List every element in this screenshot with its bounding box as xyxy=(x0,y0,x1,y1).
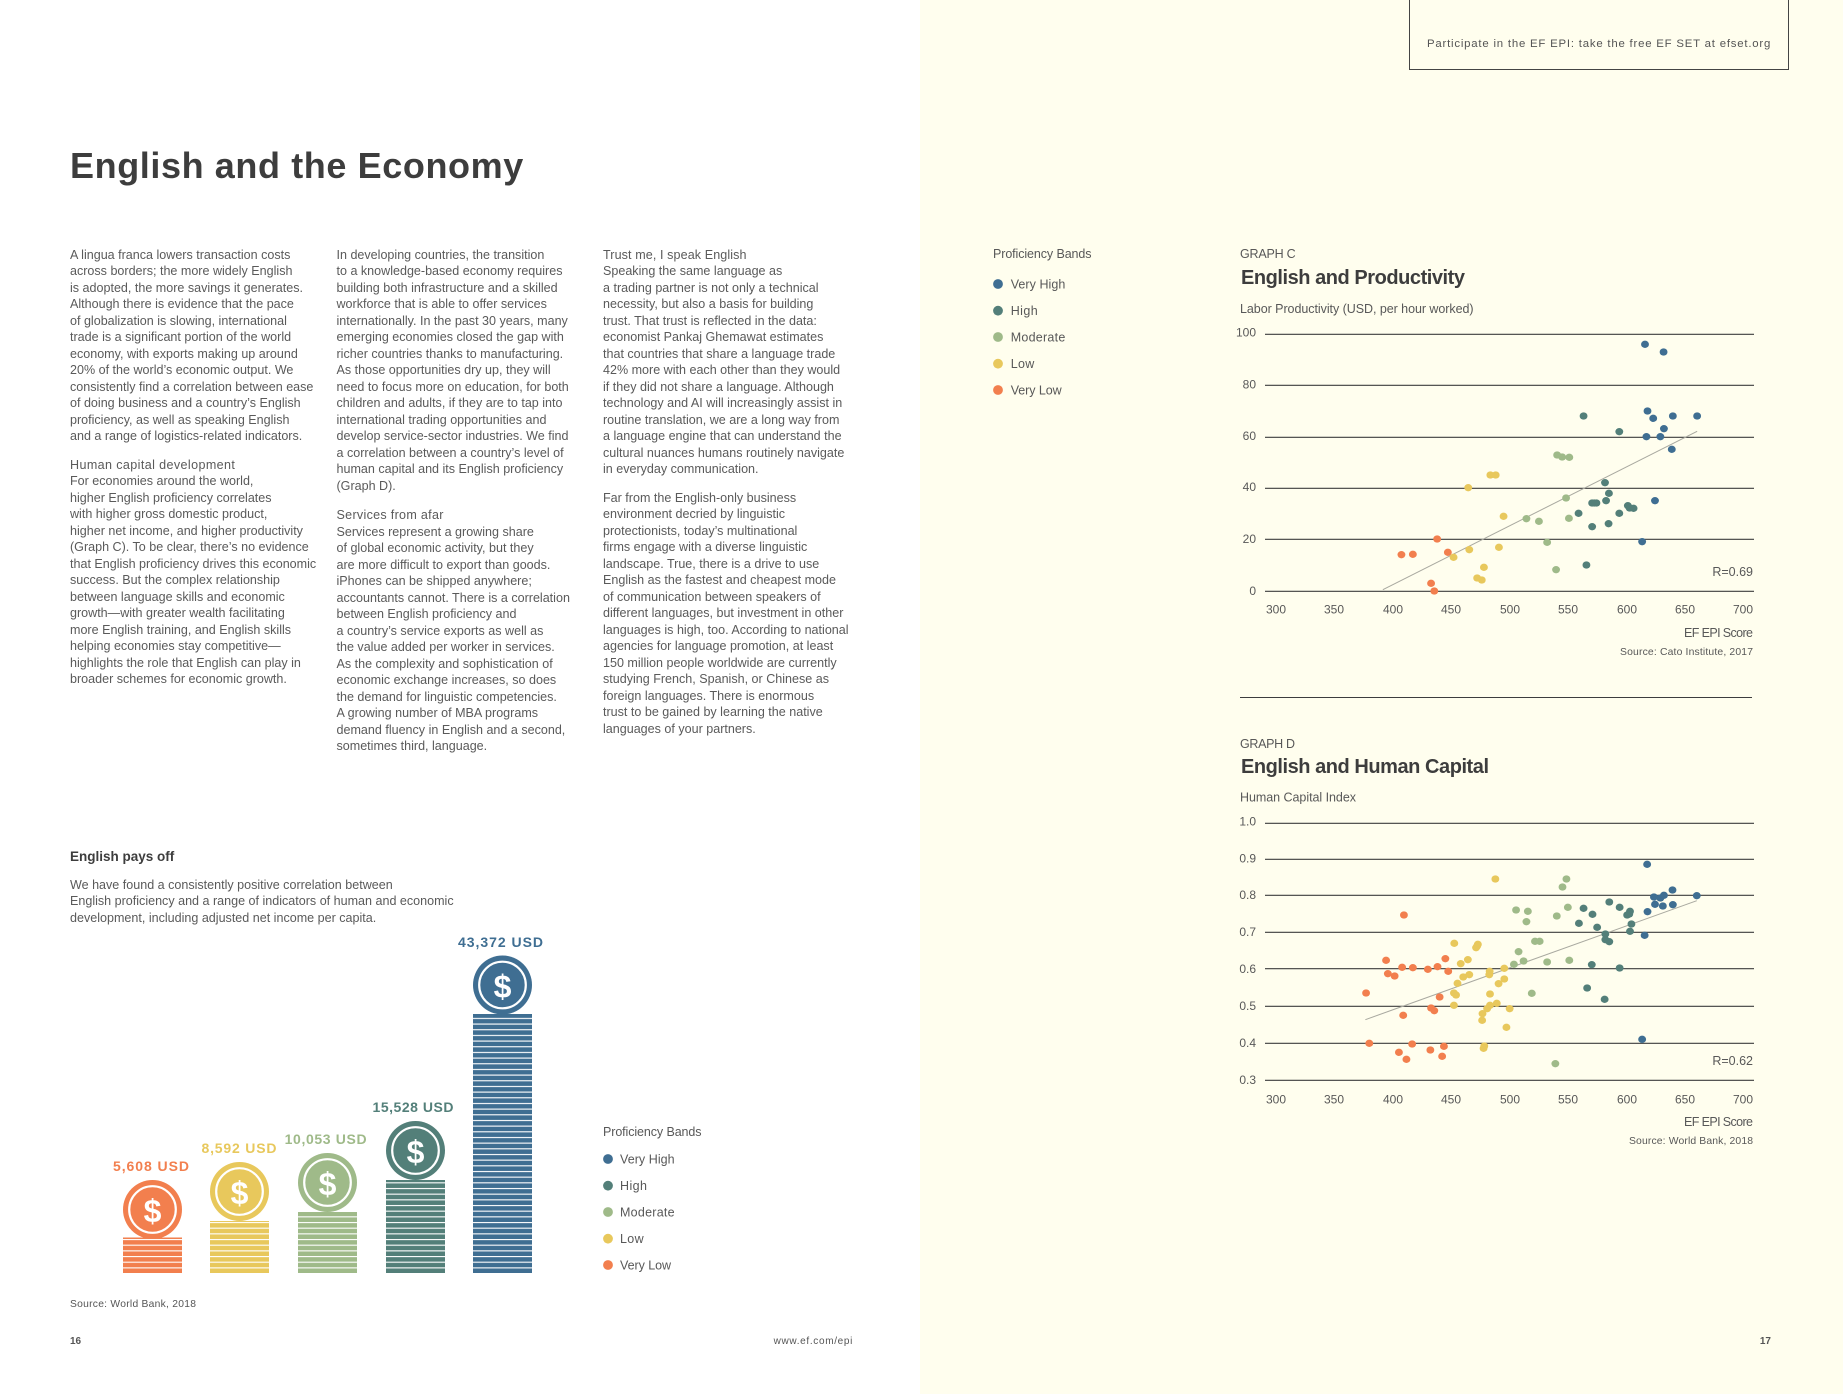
text column 2: As the complexity and sophistication of xyxy=(336,657,553,671)
text column 3: routine translation, we are a long way from xyxy=(603,413,839,427)
text column 1: 20% of the world’s economic output. We xyxy=(70,363,293,377)
text column 2: internationally. In the past 30 years, many xyxy=(336,314,568,328)
text column 1: more English training, and English skills xyxy=(70,623,291,637)
panel: right page background xyxy=(920,0,1843,1394)
legend: proficiency bands (left page): Proficiency Bands xyxy=(603,1125,702,1139)
chart: Graph C English and Productivity xyxy=(1236,247,1754,658)
text column 3: technology and AI will increasingly assist in xyxy=(603,396,842,410)
title: English and the Economy xyxy=(70,145,524,186)
text column 2: Services from afar xyxy=(336,508,444,522)
text column 2: In developing countries, the transition xyxy=(336,248,544,262)
scatter points xyxy=(1383,341,1701,595)
text column 3: trust. That trust is reflected in the data: xyxy=(603,314,817,328)
text column 1: of globalization is slowing, international xyxy=(70,314,287,328)
bar: Very Low: 5,608 USD xyxy=(113,1158,189,1174)
source: Source: World Bank, 2018 xyxy=(1629,1136,1753,1147)
text column 1: higher English proficiency correlates xyxy=(70,491,272,505)
y-axis labels: 0.5 xyxy=(1239,999,1256,1013)
text column 2: emerging economies closed the gap with xyxy=(336,330,564,344)
x-axis labels: 450 xyxy=(1441,1092,1461,1106)
x-axis labels: 500 xyxy=(1500,602,1520,616)
y-axis labels: 0.9 xyxy=(1239,852,1256,866)
text column 3: if they did not share a language. Although xyxy=(603,380,834,394)
legend: proficiency bands (left page): Moderate xyxy=(620,1206,675,1220)
legend: proficiency bands (left page): Low xyxy=(620,1232,645,1246)
callout: participate box: Participate in the EF EPI: take the free EF SET at efset.org xyxy=(1427,38,1771,50)
text column 2: Services represent a growing share xyxy=(336,525,534,539)
text column 3: protectionists, today’s multinational xyxy=(603,524,797,538)
x-axis labels: 550 xyxy=(1558,602,1578,616)
graph label: GRAPH C xyxy=(1240,247,1296,261)
text column 1: (Graph C). To be clear, there’s no evidence xyxy=(70,540,309,554)
text column 2: children and adults, if they are to tap into xyxy=(336,396,562,410)
bar: Very Low: $ xyxy=(144,1193,162,1229)
y-axis labels: 0.8 xyxy=(1239,888,1256,902)
y-axis labels: 60 xyxy=(1243,429,1256,443)
text column 2: the value added per worker in services. xyxy=(336,640,555,654)
text column 2: workforce that is able to offer services xyxy=(336,297,547,311)
text column 2: to a knowledge-based economy requires xyxy=(336,264,562,278)
bar: Low: $ xyxy=(231,1175,249,1211)
legend: proficiency bands (right page): High xyxy=(1011,304,1038,318)
text column 2: economic exchange increases, so does xyxy=(336,673,556,687)
legend: proficiency bands (right page): Very High xyxy=(1011,278,1065,292)
legend: proficiency bands (right page): Low xyxy=(1011,357,1035,371)
text column 1: is adopted, the more savings it generates. xyxy=(70,281,303,295)
text column 1: that English proficiency drives this economic xyxy=(70,557,316,571)
text column 2: building both infrastructure and a skilled xyxy=(336,281,558,295)
text column 3: environment decried by linguistic xyxy=(603,507,785,521)
text column 1: higher net income, and higher productivity xyxy=(70,524,303,538)
y-axis labels: 1.0 xyxy=(1239,814,1256,828)
text column 3: English as the fastest and cheapest mode xyxy=(603,573,836,587)
text column 2: sometimes third, language. xyxy=(336,739,487,753)
x-axis labels: 450 xyxy=(1441,602,1461,616)
text column 2: a country’s service exports as well as xyxy=(336,624,543,638)
text: English pays off description: We have found a consistently positive correlation between xyxy=(70,878,393,892)
bar: Low: 8,592 USD xyxy=(202,1140,276,1156)
legend: proficiency bands (right page) xyxy=(993,247,1092,398)
text column 2: international trading opportunities and xyxy=(336,413,546,427)
text column 3: foreign languages. There is enormous xyxy=(603,689,814,703)
text column 3: firms engage with a diverse linguistic xyxy=(603,540,807,554)
text column 2: richer countries thanks to manufacturing. xyxy=(336,347,563,361)
x-axis labels: 500 xyxy=(1500,1092,1520,1106)
legend: proficiency bands (left page) xyxy=(603,1125,702,1272)
correlation value: R=0.69 xyxy=(1712,565,1753,579)
y-axis labels xyxy=(1236,326,1256,598)
legend: proficiency bands (left page): Very Low xyxy=(620,1258,672,1272)
text column 1: Human capital development xyxy=(70,458,235,472)
text column 1: of doing business and a country’s English xyxy=(70,396,301,410)
bar: Moderate xyxy=(285,1131,367,1273)
y-axis labels: 0 xyxy=(1249,584,1256,598)
legend: proficiency bands (right page): Moderate xyxy=(1011,330,1065,344)
bar: Very High xyxy=(458,934,543,1273)
text column 2: are more difficult to export than goods. xyxy=(336,558,550,572)
x-axis labels: 700 xyxy=(1733,1092,1753,1106)
source: left chart: Source: World Bank, 2018 xyxy=(70,1299,196,1310)
text column 1: For economies around the world, xyxy=(70,474,253,488)
bar: High: $ xyxy=(407,1134,425,1170)
text column 1: growth—with greater wealth facilitating xyxy=(70,606,285,620)
y-axis labels: 100 xyxy=(1236,326,1256,340)
text column 3: a trading partner is not only a technical xyxy=(603,281,819,295)
text column 1: success. But the complex relationship xyxy=(70,573,280,587)
text column 1: highlights the role that English can play in xyxy=(70,656,301,670)
text column 3: trust to be gained by learning the native xyxy=(603,705,823,719)
text column 1: across borders; the more widely English xyxy=(70,264,292,278)
y-axis labels: 0.6 xyxy=(1239,962,1256,976)
text column 1: proficiency, as well as speaking English xyxy=(70,413,289,427)
x-axis labels: 550 xyxy=(1558,1092,1578,1106)
x-axis labels: 300 xyxy=(1266,602,1286,616)
x-axis labels: 400 xyxy=(1383,602,1403,616)
y-axis labels: 40 xyxy=(1243,480,1256,494)
text column 3: that countries that share a language trade xyxy=(603,347,835,361)
bar: Very Low xyxy=(113,1158,189,1273)
text column 1: consistently find a correlation between ease xyxy=(70,380,313,394)
text column 3: agencies for language promotion, at least xyxy=(603,639,833,653)
x-axis labels: 350 xyxy=(1324,1092,1344,1106)
text column 2: As those opportunities dry up, they will xyxy=(336,363,551,377)
bar: Very High: $ xyxy=(494,968,512,1004)
text column 3: necessity, but also a basis for building xyxy=(603,297,813,311)
legend: proficiency bands (right page): Very Low xyxy=(1011,384,1063,398)
text column 3: Trust me, I speak English xyxy=(603,248,747,262)
x-axis labels: 700 xyxy=(1733,602,1753,616)
text: English pays off description xyxy=(70,878,454,924)
x-axis title: EF EPI Score xyxy=(1684,626,1753,640)
text column 3: of communication between speakers of xyxy=(603,590,821,604)
text column 1: between language skills and economic xyxy=(70,590,285,604)
text column 3: studying French, Spanish, or Chinese as xyxy=(603,672,829,686)
y-axis title: Human Capital Index xyxy=(1240,790,1357,804)
text column 1: broader schemes for economic growth. xyxy=(70,672,287,686)
text column 2 xyxy=(336,248,570,753)
text column 3: cultural nuances humans routinely navigate xyxy=(603,446,844,460)
text column 3: languages is high, too. According to national xyxy=(603,623,849,637)
text column 1: and a range of logistics-related indicators. xyxy=(70,429,302,443)
y-axis labels: 20 xyxy=(1243,532,1256,546)
source: Source: Cato Institute, 2017 xyxy=(1620,647,1753,658)
x-axis labels xyxy=(1266,1092,1753,1106)
bar: Very High: 43,372 USD xyxy=(458,934,543,950)
footer url: www.ef.com/epi xyxy=(774,1336,853,1346)
text: English pays off description: English proficiency and a range of indicators of human and economic xyxy=(70,894,454,908)
text column 2: develop service-sector industries. We find xyxy=(336,429,568,443)
y-axis labels xyxy=(1239,814,1256,1087)
x-axis labels: 600 xyxy=(1617,1092,1637,1106)
text column 2: A growing number of MBA programs xyxy=(336,706,538,720)
x-axis labels: 350 xyxy=(1324,602,1344,616)
graph label: GRAPH D xyxy=(1240,737,1295,751)
text column 3: in everyday communication. xyxy=(603,462,759,476)
text column 1: Although there is evidence that the pace xyxy=(70,297,294,311)
y-axis labels: 80 xyxy=(1243,378,1256,392)
x-axis labels: 650 xyxy=(1675,602,1695,616)
x-axis labels: 600 xyxy=(1617,602,1637,616)
text column 2: iPhones can be shipped anywhere; xyxy=(336,574,532,588)
text column 3: different languages, but investment in other xyxy=(603,606,843,620)
text column 3: a language engine that can understand the xyxy=(603,429,842,443)
text: English pays off description: development, including adjusted net income per capita. xyxy=(70,910,376,924)
text column 1: economy, with exports making up around xyxy=(70,347,298,361)
text column 2: (Graph D). xyxy=(336,479,396,493)
correlation value: R=0.62 xyxy=(1712,1054,1753,1068)
text column 2: a correlation between a country’s level of xyxy=(336,446,564,460)
legend: proficiency bands (left page): High xyxy=(620,1179,647,1193)
bar: High: 15,528 USD xyxy=(372,1099,454,1115)
y-axis labels: 0.4 xyxy=(1239,1036,1256,1050)
text column 2: need to focus more on education, for both xyxy=(336,380,569,394)
legend: proficiency bands (right page): Proficiency Bands xyxy=(993,247,1092,261)
scatter points xyxy=(1362,861,1701,1067)
y-axis labels: 0.7 xyxy=(1239,925,1256,939)
text column 2: the demand for linguistic competencies. xyxy=(336,690,557,704)
text column 1: A lingua franca lowers transaction costs xyxy=(70,248,290,262)
text column 3: Speaking the same language as xyxy=(603,264,782,278)
text column 3: landscape. True, there is a drive to use xyxy=(603,557,819,571)
text column 3: economist Pankaj Ghemawat estimates xyxy=(603,330,823,344)
text column 2: between English proficiency and xyxy=(336,607,516,621)
graph title: English and Human Capital xyxy=(1241,756,1489,778)
page number 16: 16 xyxy=(70,1336,81,1346)
text column 2: accountants cannot. There is a correlation xyxy=(336,591,570,605)
graph title: English and Productivity xyxy=(1241,267,1466,289)
text column 1: helping economies stay competitive— xyxy=(70,639,281,653)
text column 3: 150 million people worldwide are currently xyxy=(603,656,837,670)
text column 3: languages of your partners. xyxy=(603,722,756,736)
heading: English pays off: English pays off xyxy=(70,849,174,864)
bar: Moderate: $ xyxy=(319,1166,337,1202)
x-axis title: EF EPI Score xyxy=(1684,1115,1753,1129)
text column 3: 42% more with each other than they would xyxy=(603,363,840,377)
text column 1 xyxy=(70,248,316,686)
chart: Graph D English and Human Capital xyxy=(1239,737,1754,1147)
x-axis labels: 400 xyxy=(1383,1092,1403,1106)
text column 3: Far from the English-only business xyxy=(603,491,796,505)
x-axis labels: 300 xyxy=(1266,1092,1286,1106)
page number 17: 17 xyxy=(1760,1336,1771,1346)
text column 1: with higher gross domestic product, xyxy=(70,507,267,521)
bar: Moderate: 10,053 USD xyxy=(285,1131,367,1147)
x-axis labels: 650 xyxy=(1675,1092,1695,1106)
text column 2: human capital and its English proficiency xyxy=(336,462,563,476)
text column 1: trade is a significant portion of the world xyxy=(70,330,291,344)
bar: High xyxy=(372,1099,454,1273)
x-axis labels xyxy=(1266,602,1753,616)
text column 3 xyxy=(603,248,849,736)
legend: proficiency bands (left page): Very High xyxy=(620,1152,675,1166)
text column 2: demand fluency in English and a second, xyxy=(336,723,565,737)
text column 2: of global economic activity, but they xyxy=(336,541,534,555)
y-axis labels: 0.3 xyxy=(1239,1073,1256,1087)
y-axis title: Labor Productivity (USD, per hour worked) xyxy=(1240,302,1474,316)
callout: participate box xyxy=(1409,0,1789,70)
bar: Low xyxy=(202,1140,276,1273)
